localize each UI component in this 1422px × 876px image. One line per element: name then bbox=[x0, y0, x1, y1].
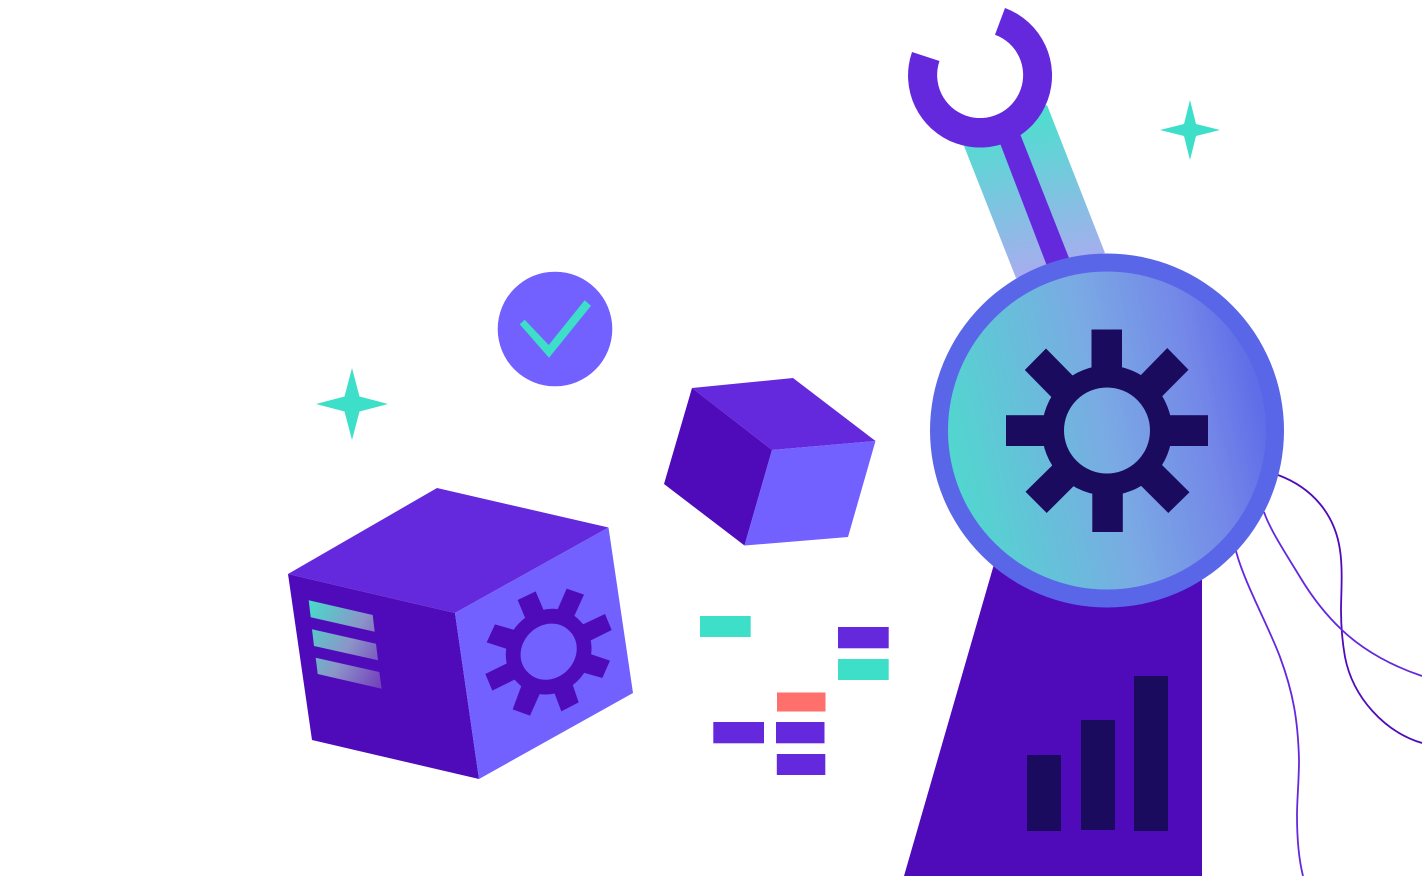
box right face bbox=[455, 528, 633, 779]
dial rim bbox=[930, 254, 1284, 608]
list bars on box bbox=[309, 600, 382, 689]
box left face bbox=[288, 574, 479, 779]
bar chart bbox=[1027, 676, 1168, 831]
wrench bbox=[908, 8, 1105, 278]
wire: middle cable bbox=[1264, 512, 1422, 676]
small cube left face bbox=[664, 388, 772, 546]
icon: check mark bbox=[520, 300, 591, 358]
wire: lower cable bbox=[1236, 551, 1303, 876]
sparkle: left bbox=[316, 368, 388, 440]
stand with bar chart bbox=[904, 540, 1202, 876]
check badge bbox=[498, 272, 612, 386]
wrench head bbox=[908, 8, 1052, 148]
box top face bbox=[288, 488, 608, 613]
small cube right face bbox=[744, 441, 876, 546]
wrench handle band bbox=[964, 105, 1105, 278]
dial with gear bbox=[930, 254, 1284, 608]
sparkle: right bbox=[1160, 100, 1220, 160]
dial face bbox=[948, 272, 1266, 590]
small cube top face bbox=[692, 378, 876, 450]
icon: box gear bbox=[485, 589, 612, 716]
floating blocks bbox=[700, 616, 889, 775]
wire: dark cable bbox=[1278, 475, 1422, 743]
large box bbox=[288, 488, 633, 779]
wrench handle stem bbox=[993, 116, 1069, 266]
stand body bbox=[904, 540, 1202, 876]
small cube bbox=[664, 378, 876, 546]
icon: gear bbox=[1006, 330, 1208, 532]
badge circle bbox=[498, 272, 612, 386]
